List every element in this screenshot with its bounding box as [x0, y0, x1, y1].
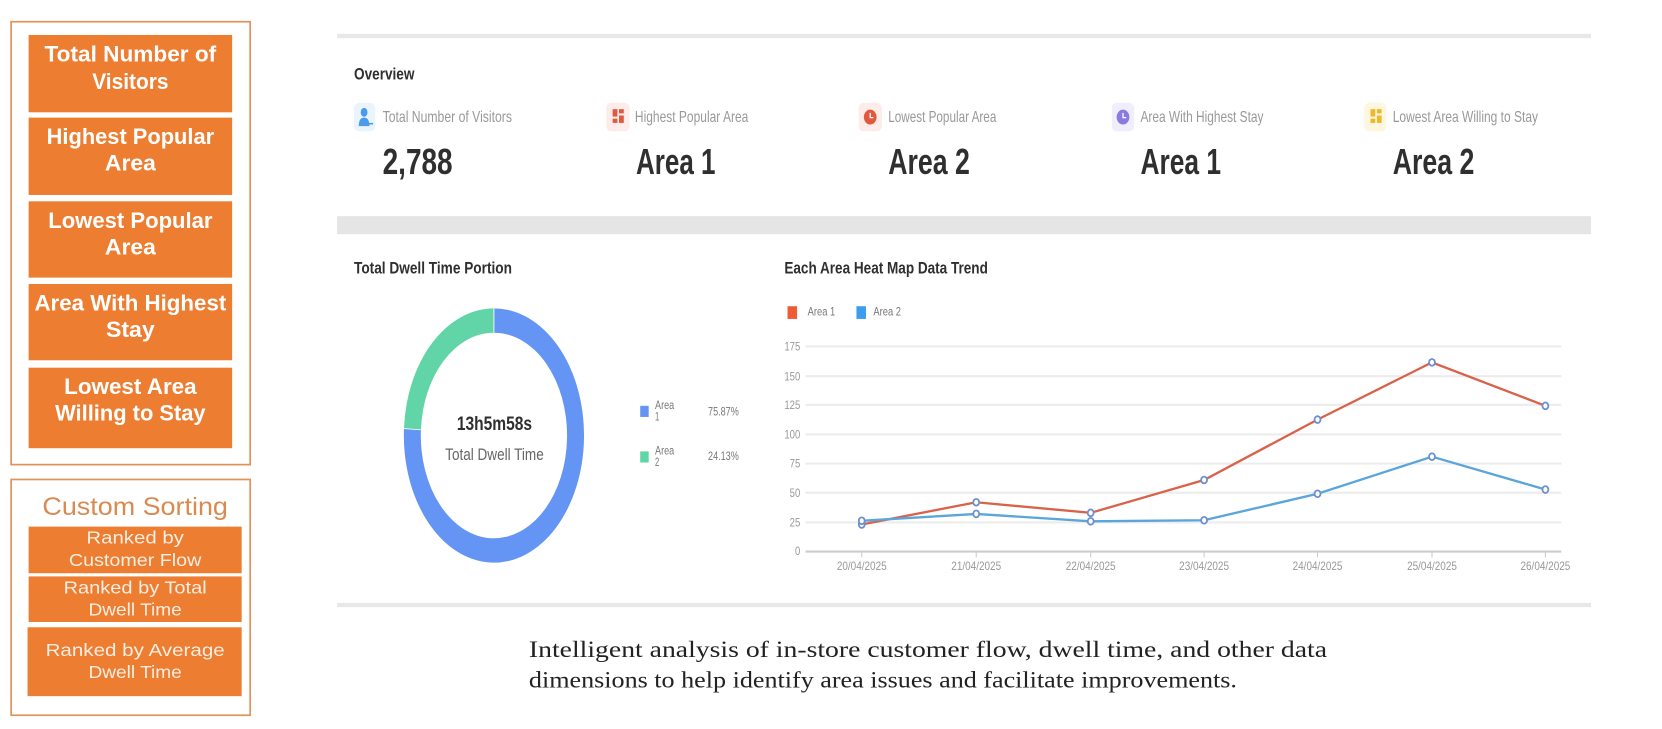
icon: yellow blocks — [1364, 103, 1386, 131]
stat: area with highest stay: Area With Highest Stay — [1141, 109, 1264, 126]
stat: highest popular area: Highest Popular Area — [635, 109, 749, 126]
line chart: area heat map trend: 150 — [784, 369, 800, 383]
stat: total number of visitors: 2,788 — [383, 141, 453, 182]
button: ranked by average dwell time: Dwell Time — [89, 662, 182, 682]
button: ranked by average dwell time — [28, 627, 242, 696]
button: area with highest stay: Stay — [106, 317, 155, 342]
line chart legend: Area 1 — [808, 305, 835, 319]
caption: dimensions to help identify area issues and facilitate improvements. — [529, 668, 1237, 693]
line chart legend — [788, 305, 901, 319]
button: highest popular area — [29, 118, 232, 195]
panel: custom sorting — [11, 479, 250, 715]
stat: lowest area willing to stay: Lowest Area Willing to Stay — [1393, 109, 1538, 126]
button: total number of visitors: Visitors — [92, 69, 169, 94]
line chart: area heat map trend: 75 — [790, 456, 800, 470]
stat: lowest area willing to stay — [1364, 103, 1538, 182]
button: ranked by customer flow: Customer Flow — [69, 550, 202, 570]
donut chart: total dwell time: Total Dwell Time — [445, 446, 544, 464]
donut legend: Area — [655, 398, 674, 412]
icon: red clock — [859, 103, 882, 131]
donut chart: total dwell time: 13h5m58s — [457, 413, 532, 435]
stat: total number of visitors: Total Number of Visitors — [383, 109, 512, 126]
button: total number of visitors — [29, 35, 232, 112]
line chart: area heat map trend: 22/04/2025 — [1066, 559, 1116, 573]
button: lowest popular area — [29, 201, 232, 278]
button: lowest area willing to stay: Lowest Area — [64, 374, 198, 399]
button: area with highest stay — [29, 284, 232, 360]
line chart: area heat map trend: 25/04/2025 — [1407, 559, 1457, 573]
button: lowest area willing to stay: Willing to Stay — [55, 401, 206, 426]
heading: total dwell time portion: Total Dwell Time Portion — [354, 259, 512, 277]
button: lowest popular area: Lowest Popular — [48, 208, 213, 233]
icon: visitor — [354, 103, 375, 131]
stat: highest popular area — [606, 103, 749, 182]
line chart: area heat map trend: 50 — [790, 486, 800, 500]
button: ranked by total dwell time: Ranked by Total — [64, 577, 207, 597]
donut legend: 24.13% — [708, 449, 739, 463]
line chart: area heat map trend: 24/04/2025 — [1293, 559, 1343, 573]
donut legend — [640, 398, 739, 469]
button: ranked by customer flow: Ranked by — [86, 528, 184, 548]
button: total number of visitors: Total Number of — [45, 41, 217, 66]
line chart: area heat map trend: 25 — [790, 516, 800, 530]
button: lowest area willing to stay — [29, 368, 232, 448]
line chart: area heat map trend: 125 — [784, 398, 800, 412]
stat: lowest popular area: Area 2 — [888, 141, 970, 182]
line chart: area heat map trend: 23/04/2025 — [1179, 559, 1229, 573]
line chart: area heat map trend: 0 — [795, 544, 800, 558]
donut legend: Area — [655, 444, 674, 458]
button: ranked by average dwell time: Ranked by Average — [46, 640, 225, 660]
button: ranked by customer flow — [29, 527, 242, 573]
stat: area with highest stay — [1112, 103, 1264, 182]
button: area with highest stay: Area With Highest — [34, 290, 226, 315]
series: area 1 — [859, 359, 1548, 528]
caption — [529, 637, 1327, 693]
stat: area with highest stay: Area 1 — [1141, 141, 1221, 182]
stat: lowest area willing to stay: Area 2 — [1393, 141, 1474, 182]
line chart: area heat map trend: 175 — [784, 340, 800, 354]
donut legend: 75.87% — [708, 404, 739, 418]
donut legend: 1 — [655, 410, 659, 424]
heading: each area heat map data trend: Each Area Heat Map Data Trend — [784, 259, 988, 277]
stat: lowest popular area: Lowest Popular Area — [888, 109, 997, 126]
button: ranked by total dwell time: Dwell Time — [89, 600, 182, 620]
line chart: area heat map trend — [784, 340, 1571, 573]
line chart: area heat map trend: 20/04/2025 — [837, 559, 887, 573]
panel: metrics menu — [11, 22, 250, 465]
heading: overview: Overview — [354, 65, 415, 83]
donut chart: total dwell time — [404, 308, 584, 563]
line chart: area heat map trend: 21/04/2025 — [951, 559, 1001, 573]
line chart legend: Area 2 — [873, 305, 901, 319]
button: lowest popular area: Area — [105, 234, 157, 259]
button: highest popular area: Highest Popular — [47, 124, 215, 149]
stat: highest popular area: Area 1 — [636, 141, 715, 182]
icon: purple clock — [1112, 103, 1134, 131]
icon: red blocks — [606, 103, 630, 131]
caption: Intelligent analysis of in-store customer flow, dwell time, and other data — [529, 637, 1327, 662]
button: highest popular area: Area — [105, 151, 157, 176]
stat: lowest popular area — [859, 103, 997, 182]
line chart: area heat map trend: 26/04/2025 — [1520, 559, 1571, 573]
stat: total number of visitors — [354, 103, 512, 182]
button: ranked by total dwell time — [29, 576, 242, 622]
donut legend: 2 — [655, 455, 659, 469]
series: area 2 — [859, 453, 1548, 525]
line chart: area heat map trend: 100 — [784, 428, 800, 442]
heading: custom sorting: Custom Sorting — [42, 493, 228, 521]
